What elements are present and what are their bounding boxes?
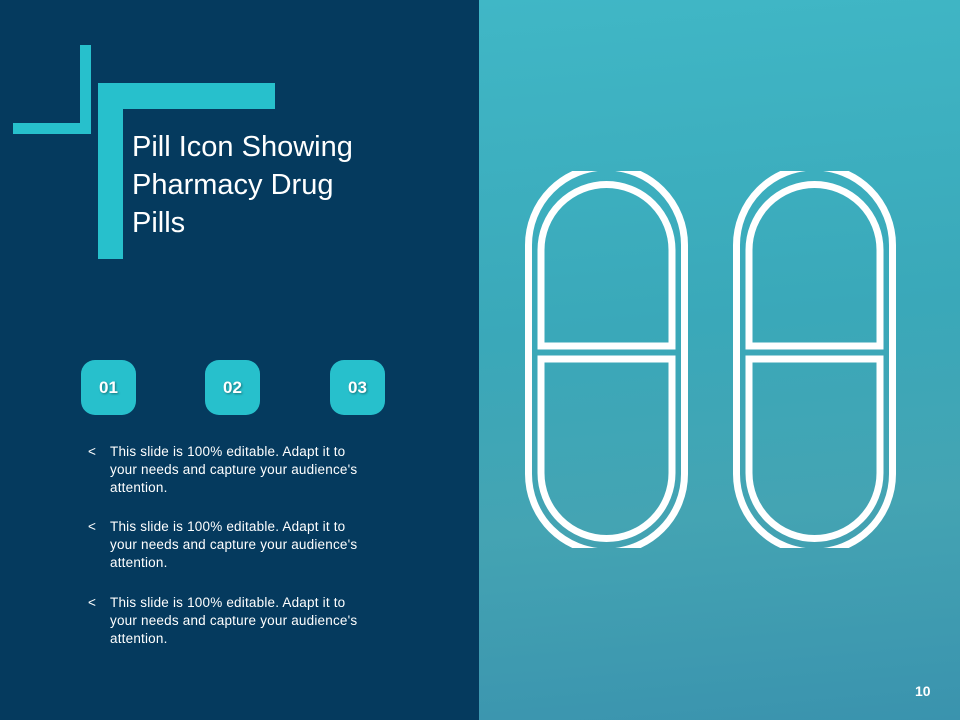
icon: pill right xyxy=(736,167,892,552)
decorative bracket small xyxy=(13,45,91,134)
badge 03 xyxy=(330,360,385,415)
page number: 10 xyxy=(915,683,931,699)
badge 02: 02 xyxy=(223,378,242,397)
text block 3: < xyxy=(88,595,96,610)
title: Pill Icon Showing Pharmacy Drug Pills xyxy=(132,131,353,239)
badge 03: 03 xyxy=(348,378,367,397)
badge 01 xyxy=(81,360,136,415)
text block 2: This slide is 100% editable. Adapt it to your needs and capture your audience's attention. xyxy=(110,519,357,570)
decorative bracket large xyxy=(98,83,275,259)
badge 02 xyxy=(205,360,260,415)
icon: pill left xyxy=(528,167,684,552)
text block 1: < xyxy=(88,444,96,459)
panel: right image background xyxy=(479,0,960,720)
text block 1: This slide is 100% editable. Adapt it to your needs and capture your audience's attention. xyxy=(110,444,357,495)
text block 2: < xyxy=(88,519,96,534)
text block 3: This slide is 100% editable. Adapt it to your needs and capture your audience's attention. xyxy=(110,595,357,646)
badge 01: 01 xyxy=(99,378,118,397)
icon: pills xyxy=(525,171,896,548)
